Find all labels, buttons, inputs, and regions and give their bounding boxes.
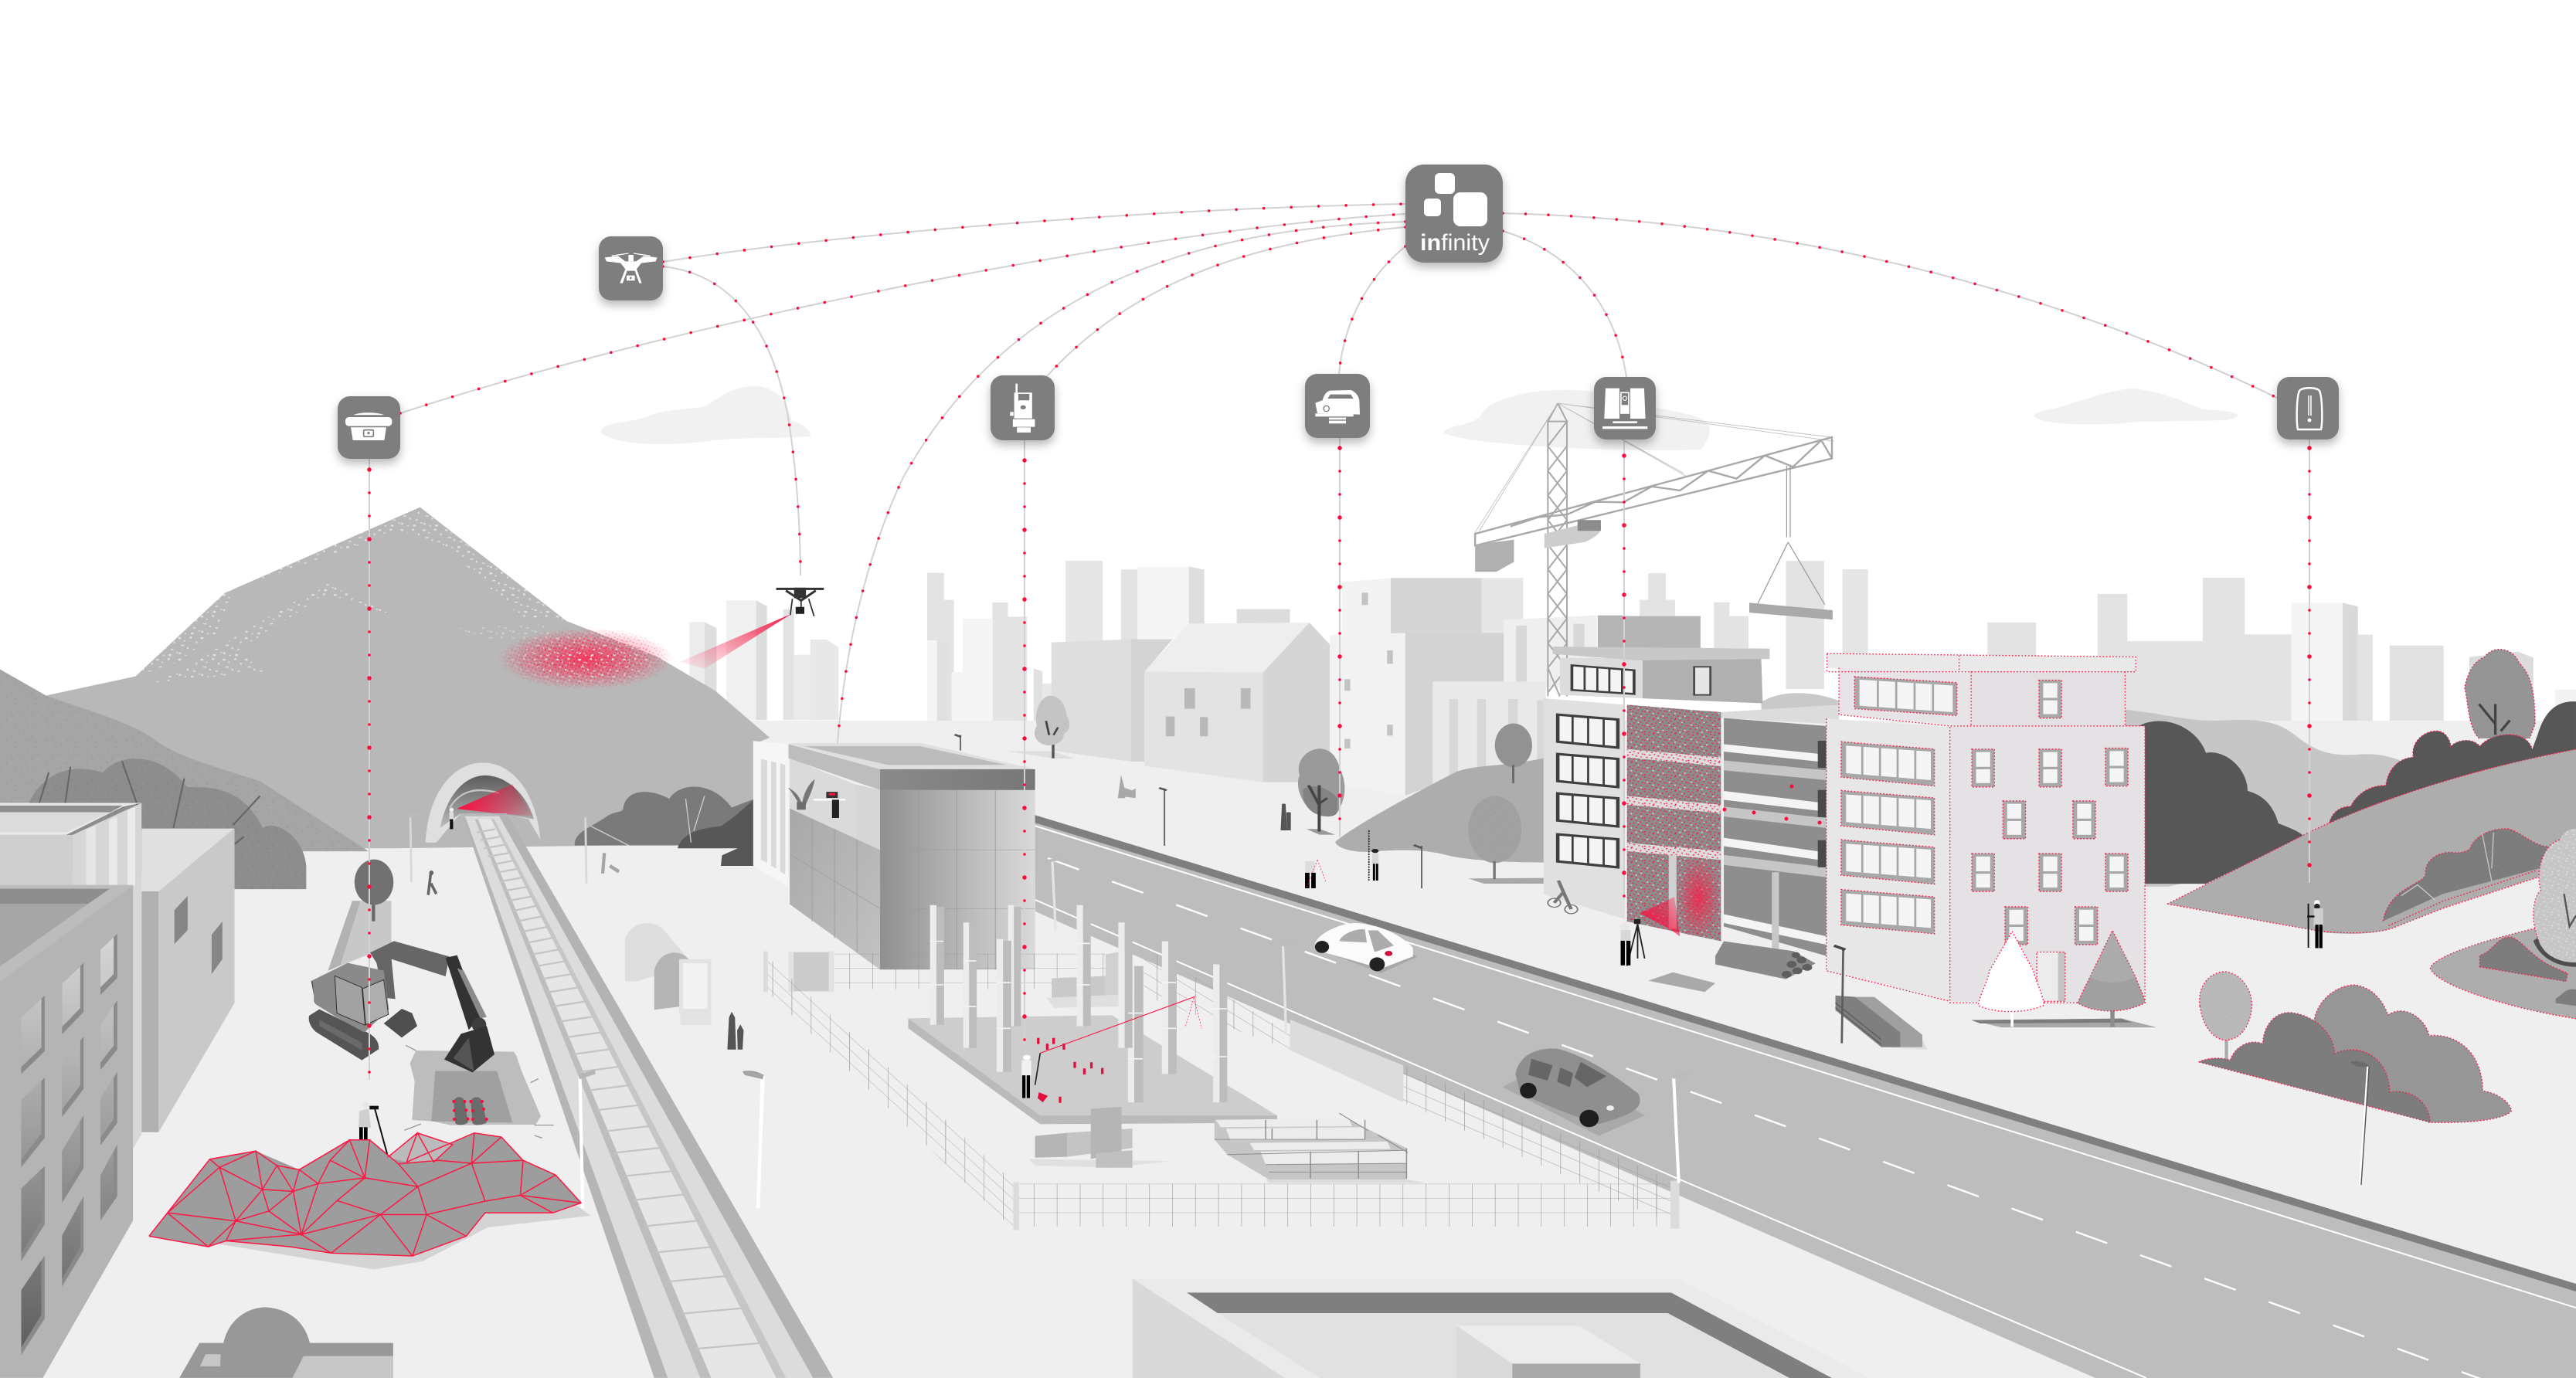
mountain bbox=[46, 507, 770, 848]
office: fascia bbox=[880, 769, 1035, 790]
tree by concrete building bbox=[1495, 724, 1532, 783]
red dots: small bbox=[400, 204, 1405, 743]
cyclist bbox=[1548, 881, 1578, 914]
surveyor with tripod bbox=[1305, 854, 1327, 888]
tall building lower bbox=[1330, 592, 1504, 796]
concrete blocks bbox=[1028, 1107, 1170, 1168]
surveyor with staff bbox=[1369, 830, 1378, 881]
pipe stack bbox=[1715, 942, 1816, 979]
site fence: upper right bbox=[1144, 948, 1290, 1050]
small tree bbox=[2200, 972, 2252, 1061]
back concrete block bbox=[1047, 952, 1144, 1008]
hill behind street bbox=[1335, 759, 1544, 863]
grey cone tree bbox=[2078, 931, 2145, 1027]
white cone tree bbox=[1978, 932, 2044, 1027]
surveyor with rover pole bbox=[2307, 900, 2323, 948]
grey car bbox=[1503, 1049, 1645, 1136]
railway sleepers bbox=[477, 829, 763, 1349]
crane wires bbox=[1475, 403, 1834, 532]
rear building bbox=[0, 803, 141, 1149]
mountain with tunnel and bushes bbox=[0, 507, 824, 895]
pipe survey points bbox=[452, 1100, 488, 1121]
surveyors on pavement bbox=[955, 735, 1422, 888]
hook and slings bbox=[1758, 466, 1825, 605]
connection lines bbox=[369, 204, 2309, 1080]
street lamps on site bbox=[743, 859, 1691, 1208]
surveyor at spoil heap bbox=[359, 1102, 388, 1156]
far lamps and walkers bbox=[408, 814, 619, 895]
bushes right of tunnel bbox=[575, 787, 754, 866]
left city blocks bbox=[0, 803, 393, 1378]
road edge lines bbox=[1035, 826, 2576, 1378]
drain cover bbox=[1648, 972, 1715, 992]
icon: total station bbox=[991, 375, 1055, 440]
street lamps bbox=[960, 735, 1422, 888]
front building bbox=[0, 885, 133, 1378]
distant hill bbox=[2126, 710, 2407, 887]
tree shadow bed bbox=[1971, 1019, 2157, 1027]
Infinity wordmark: infinity bbox=[1420, 230, 1490, 256]
large hill bbox=[2167, 749, 2576, 934]
excavator bucket bbox=[444, 1026, 494, 1072]
crane boom bbox=[1475, 437, 1832, 545]
bushes behind buildings bbox=[0, 759, 306, 889]
white building: door bbox=[2037, 952, 2065, 1001]
counterweight bbox=[1475, 540, 1514, 572]
clouds bbox=[600, 386, 2238, 450]
excavation pit bbox=[404, 1045, 554, 1138]
retaining wall bbox=[1290, 1020, 1403, 1102]
red dots: arcs bbox=[1339, 213, 2277, 398]
ground bbox=[0, 721, 2576, 1378]
construction buildings bbox=[1544, 616, 2157, 1050]
tree pedestal shadow bbox=[328, 901, 391, 971]
office: white curtain wall bbox=[753, 741, 788, 887]
office: roof bbox=[788, 743, 1035, 790]
heap shadow bbox=[206, 1204, 591, 1269]
site fence: back bbox=[788, 952, 1106, 993]
laser line and stake-out points bbox=[1037, 996, 1195, 1103]
rebar stacks bbox=[1215, 1113, 1426, 1183]
crane cab bbox=[1545, 520, 1601, 548]
icon: field controller bbox=[2277, 377, 2339, 440]
concrete building: laser scanned facade bbox=[1627, 704, 1721, 942]
icon: drone bbox=[599, 236, 663, 300]
crane mast bbox=[1548, 403, 1567, 697]
dark bush left bbox=[2126, 721, 2304, 884]
street lamps by railway bbox=[579, 1071, 763, 1208]
middle building bbox=[141, 829, 235, 1132]
parent and child bbox=[727, 1012, 743, 1050]
lamp in bush bbox=[2350, 1061, 2369, 1185]
surveyor in tunnel bbox=[450, 807, 454, 829]
bottom foreground building bbox=[1133, 1278, 1871, 1378]
mid-distance buildings bbox=[960, 578, 1623, 888]
red survey mesh bbox=[149, 1133, 581, 1256]
tree on hill bbox=[1468, 796, 1544, 884]
icon: laser scanner bbox=[1594, 377, 1656, 440]
triangulated spoil heap bbox=[149, 1133, 591, 1269]
street lamp bbox=[1834, 945, 1845, 1044]
concrete slab bbox=[908, 1015, 1277, 1124]
house bbox=[1144, 623, 1330, 782]
street lamp heads bbox=[955, 735, 1422, 848]
tree top right bbox=[2465, 650, 2535, 738]
skyline: centre towers bbox=[927, 561, 1290, 724]
concrete building: penthouse bbox=[1553, 647, 1769, 703]
concrete columns bbox=[930, 905, 1227, 1102]
roof parapet bbox=[1187, 1293, 1832, 1378]
red dots: vertical small bbox=[369, 448, 2309, 1080]
road bbox=[1035, 815, 2576, 1378]
large bush front layer bbox=[2199, 1013, 2430, 1122]
red dots on concrete building bbox=[1723, 785, 1822, 825]
snow texture on ridge bbox=[114, 507, 566, 684]
excavator stick bbox=[446, 955, 487, 1032]
excavator rear track bbox=[384, 1009, 417, 1037]
skyline: right towers bbox=[1468, 561, 2291, 731]
front building windows bbox=[21, 934, 117, 1355]
office: open recess with desk bbox=[788, 759, 856, 839]
small hill between buildings bbox=[1762, 693, 1843, 712]
excavator cab bbox=[311, 963, 389, 1033]
dark bushes behind hill bbox=[2329, 701, 2576, 829]
icon: digital level bbox=[1305, 374, 1370, 438]
street tree bbox=[1298, 748, 1344, 835]
tree bbox=[355, 860, 393, 921]
tall building upper bbox=[1342, 578, 1523, 636]
office: front panels bbox=[880, 790, 1035, 969]
road centre dashes bbox=[1048, 858, 2576, 1378]
skyline: left towers bbox=[689, 600, 838, 720]
skyline: far right towers bbox=[2009, 579, 2576, 735]
large bush back layer bbox=[2298, 985, 2512, 1122]
white building: windows bbox=[1841, 677, 2128, 945]
skyline bbox=[689, 561, 2576, 735]
bus shelter, billboard and people bbox=[328, 860, 763, 1208]
bush on lawn bbox=[2479, 937, 2576, 1006]
billboard bbox=[679, 959, 711, 1025]
crane load bbox=[1749, 602, 1833, 619]
textured tree at right edge bbox=[2534, 829, 2576, 967]
office: corner pier bbox=[856, 785, 880, 850]
timber pallet bbox=[1836, 996, 1927, 1050]
surveyor on slab bbox=[1021, 1053, 1040, 1098]
tripod instrument bbox=[1185, 998, 1201, 1028]
red dots: emphasised bbox=[369, 448, 2309, 1080]
front fence bbox=[1019, 1181, 1680, 1229]
white building: walls bbox=[1827, 653, 2145, 1003]
small domed building bbox=[179, 1307, 393, 1378]
pedestrian with dog bbox=[1118, 775, 1136, 798]
Infinity logo bbox=[1424, 173, 1487, 226]
right hills and vegetation bbox=[2126, 650, 2576, 1185]
oval lawn bbox=[2430, 923, 2576, 1019]
family silhouettes bbox=[1280, 804, 1291, 830]
site fence: right bbox=[1403, 1065, 1672, 1226]
bus shelter bbox=[625, 923, 689, 1010]
drone laser beam bbox=[680, 614, 791, 669]
heap body bbox=[149, 1133, 581, 1256]
striped buildings bbox=[1432, 616, 1623, 785]
grey link lines bbox=[369, 204, 2309, 1080]
rooftop box bbox=[1456, 1325, 1640, 1378]
office building bbox=[743, 741, 1691, 1230]
drone bbox=[777, 588, 824, 616]
surveyor with total station bbox=[1620, 919, 1645, 966]
excavator boom bbox=[370, 941, 450, 999]
excavator and pit bbox=[309, 941, 554, 1156]
red drone scan patch bbox=[496, 626, 675, 691]
concrete building: left wall with windows bbox=[1544, 698, 1625, 919]
left hill bbox=[0, 670, 369, 851]
tunnel portal bbox=[426, 762, 540, 843]
railway bbox=[464, 813, 833, 1378]
block behind house bbox=[1052, 640, 1172, 762]
concrete building: background block bbox=[1599, 616, 1701, 656]
buried pipes bbox=[454, 1097, 487, 1125]
bush on hill bbox=[2383, 829, 2551, 921]
white car bbox=[1315, 923, 1418, 973]
tree behind office bbox=[1007, 696, 1073, 759]
office: left panels bbox=[790, 809, 880, 969]
crane bbox=[1475, 403, 1834, 697]
small mound bbox=[388, 1133, 453, 1162]
icon: Infinity software hub bbox=[1405, 165, 1503, 263]
excavator front track bbox=[309, 1010, 379, 1061]
concrete building: balconies bbox=[1721, 704, 1839, 956]
site fence: left bbox=[763, 952, 1019, 1230]
icon: GNSS receiver bbox=[338, 396, 400, 459]
